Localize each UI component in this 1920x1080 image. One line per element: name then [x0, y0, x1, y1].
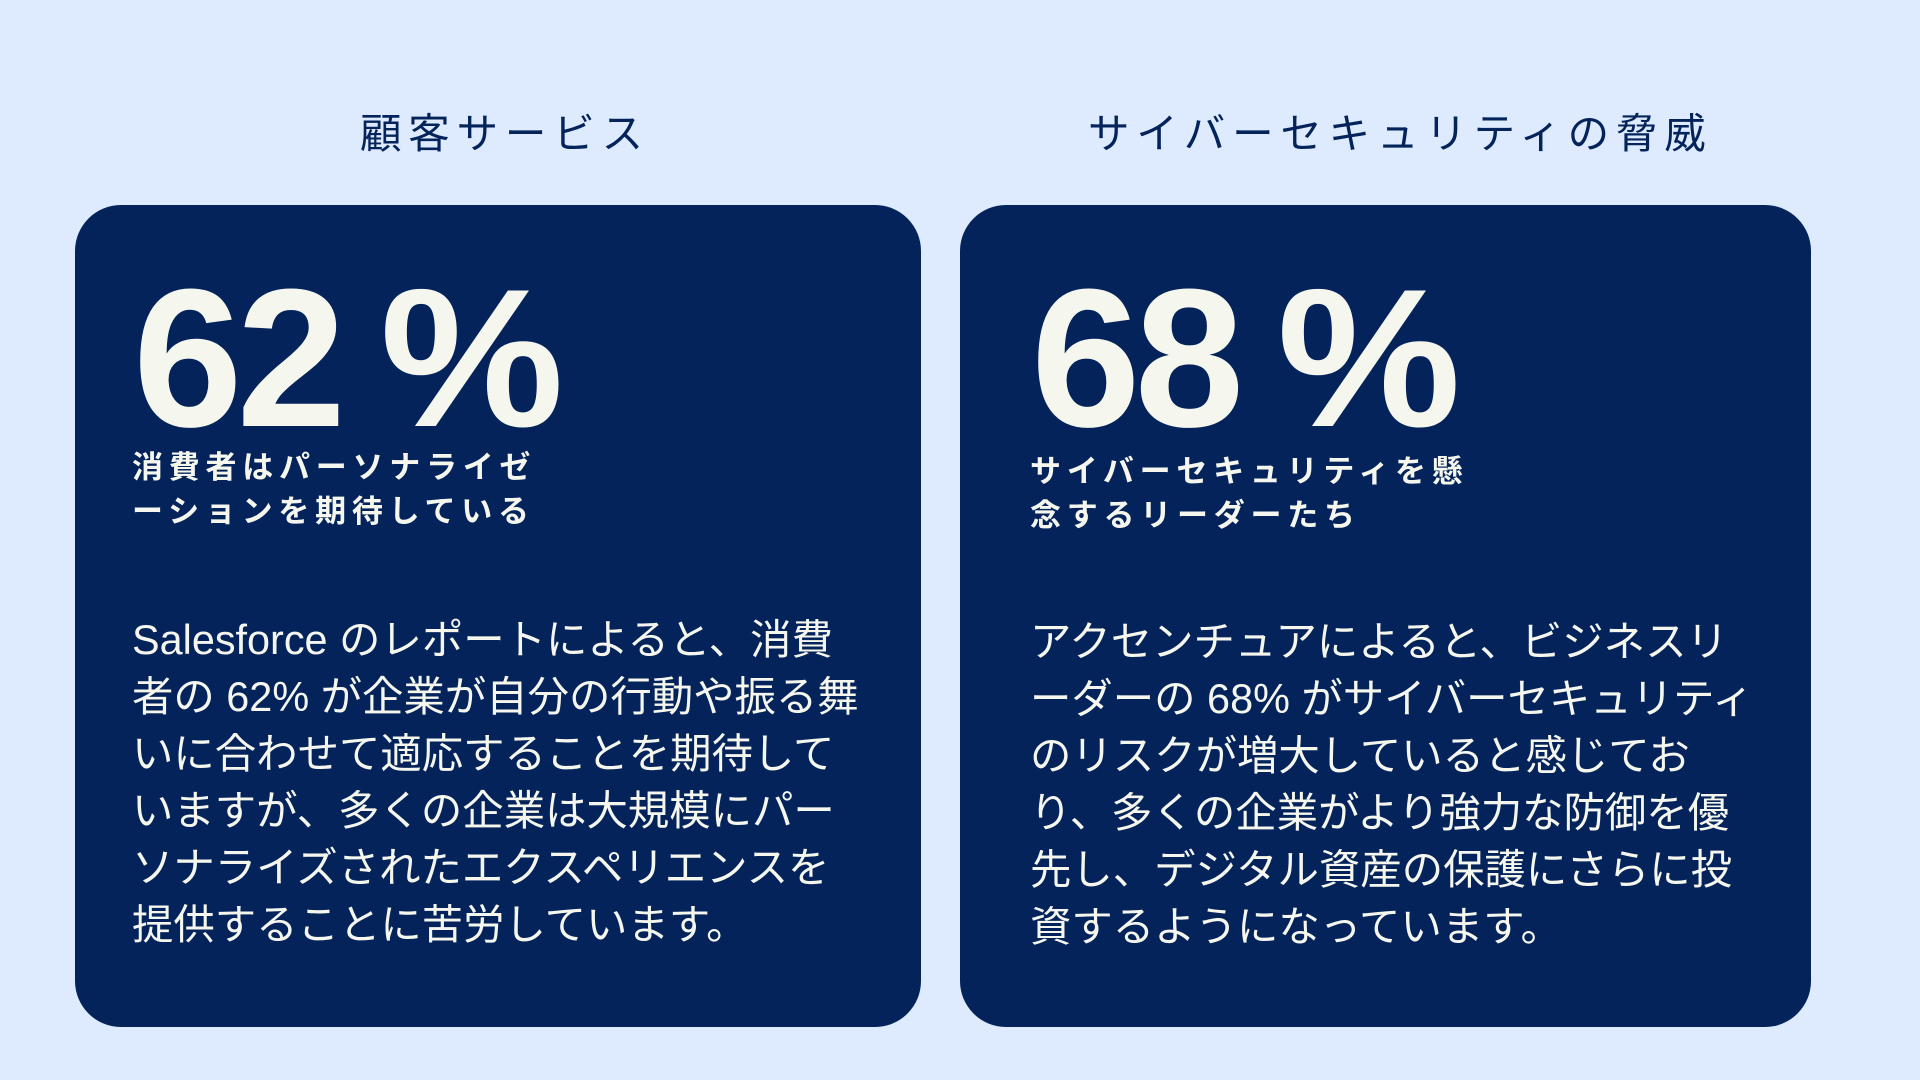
subheading: leaders concerned about cybersecurity: サイバーセキュリティを懸 [1030, 454, 1469, 488]
big stat: 68%: 68 [1031, 248, 1238, 468]
body text: Salesforce report: いますが、多くの企業は大規模にパー [132, 788, 835, 834]
subheading: consumers expect personalization: ーションを期待している [132, 494, 535, 529]
body text: Salesforce report: 者の 62% が企業が自分の行動や振る舞 [132, 674, 859, 720]
body text: Accenture report: り、多くの企業がより強力な防御を優 [1030, 790, 1729, 836]
body text: Accenture report: 資するようになっています。 [1030, 904, 1562, 950]
heading: customer service: 顧客サービス [360, 110, 650, 156]
big stat: 68%: % [1277, 248, 1461, 468]
body text: Salesforce report: ソナライズされたエクスペリエンスを [132, 844, 829, 890]
body text: Accenture report: 先し、デジタル資産の保護にさらに投 [1030, 846, 1732, 892]
subheading: leaders concerned about cybersecurity: 念するリーダーたち [1030, 498, 1361, 532]
subheading: consumers expect personalization: 消費者はパーソナライゼ [132, 450, 536, 485]
subheading: consumers expect personalization [132, 450, 536, 529]
body text: Salesforce report [132, 616, 859, 948]
subheading: leaders concerned about cybersecurity [1030, 454, 1469, 532]
panel: customer service [75, 205, 921, 1027]
body text: Accenture report: のリスクが増大していると感じてお [1030, 732, 1690, 778]
panel: cybersecurity threats [960, 205, 1811, 1027]
big stat: 62% [133, 248, 564, 468]
big stat: 68% [1031, 248, 1461, 468]
body text: Salesforce report: いに合わせて適応することを期待して [132, 730, 834, 776]
big stat: 62%: 62 [133, 248, 340, 468]
body text: Salesforce report: 提供することに苦労しています。 [132, 902, 747, 948]
body text: Accenture report: アクセンチュアによると、ビジネスリ [1030, 618, 1728, 664]
body text: Accenture report: ーダーの 68% がサイバーセキュリティ [1030, 676, 1753, 722]
heading: cybersecurity threats: サイバーセキュリティの脅威 [1088, 110, 1713, 156]
body text: Salesforce report: Salesforce のレポートによると、消費 [132, 616, 833, 662]
body text: Accenture report [1030, 618, 1753, 950]
big stat: 62%: % [380, 248, 564, 468]
